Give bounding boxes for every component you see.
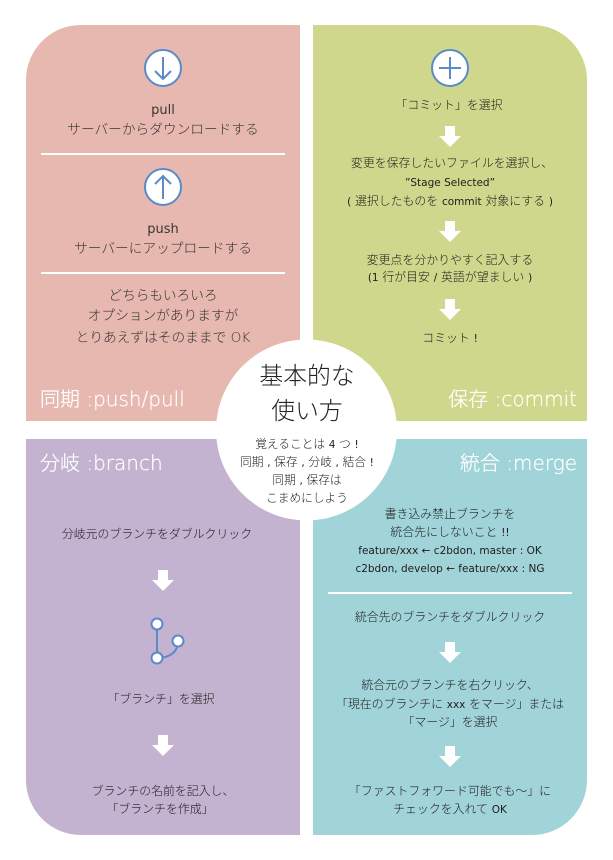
text: push: push: [147, 222, 179, 237]
center title: 使い方: [271, 397, 343, 425]
text: options note: どちらもいろいろ: [108, 288, 218, 304]
text: write message: (1 行が目安 / 英語が望ましい ): [368, 270, 532, 284]
text: options note: オプションがありますが: [88, 308, 239, 324]
center title: 基本的な: [259, 362, 355, 390]
text: options note: とりあえずはそのままで OK: [76, 330, 250, 346]
text: right click: 統合元のブランチを右クリック、: [361, 678, 539, 692]
text: write message: 変更点を分かりやすく記入する: [367, 253, 533, 267]
icon: pull down arrow: [145, 50, 181, 86]
heading: sync: 同期 :push/pull: [40, 387, 185, 411]
text: right click: 「マージ」を選択: [403, 715, 498, 729]
text: double click source: 分岐元のブランチをダブルクリック: [62, 527, 252, 541]
text: fast forward: チェックを入れて OK: [393, 802, 507, 816]
text: double click target: 統合先のブランチをダブルクリック: [355, 610, 545, 624]
text: protected branch warning: feature/xxx ← c2bdon, master : OK: [358, 545, 543, 557]
center circle: [216, 340, 397, 520]
center text: 同期 , 保存 , 分岐 , 結合 !: [240, 455, 374, 469]
text: push: サーバーにアップロードする: [74, 241, 252, 257]
heading: merge: 統合 :merge: [460, 451, 577, 475]
text: select branch: 「ブランチ」を選択: [107, 692, 215, 706]
icon: plus: [432, 50, 468, 86]
arrow: [439, 221, 461, 242]
arrow: [439, 746, 461, 767]
center text: 同期 , 保存は: [272, 473, 342, 487]
text: protected branch warning: 統合先にしないこと !!: [390, 525, 510, 539]
text: pull: サーバーからダウンロードする: [67, 122, 259, 138]
arrow: [439, 299, 461, 320]
text: choose files: ( 選択したものを commit 対象にする ): [347, 194, 553, 208]
panel: sync push/pull: [26, 25, 300, 421]
arrow: [152, 570, 174, 591]
arrow: [152, 735, 174, 756]
text: choose files: 変更を保存したいファイルを選択し、: [351, 156, 553, 170]
text: pull: pull: [151, 103, 175, 118]
arrow: [439, 126, 461, 147]
text: name branch: 「ブランチを作成」: [106, 802, 214, 816]
panel: merge: [313, 439, 587, 835]
center text: 覚えることは 4 つ !: [255, 437, 359, 451]
heading: save: 保存 :commit: [448, 387, 577, 411]
text: fast forward: 「ファストフォワード可能でも～」に: [349, 784, 551, 798]
icon: push up arrow: [145, 169, 181, 205]
center text: こまめにしよう: [266, 491, 348, 505]
text: protected branch warning: 書き込み禁止ブランチを: [385, 507, 515, 521]
panel: branch: [26, 439, 300, 835]
icon: branch: [152, 618, 184, 664]
heading: branch: 分岐 :branch: [40, 451, 163, 475]
text: select commit: 「コミット」を選択: [395, 98, 503, 112]
text: name branch: ブランチの名前を記入し、: [92, 784, 234, 798]
text: protected branch warning: c2bdon, develop ← feature/xxx : NG: [355, 563, 545, 575]
arrow: [439, 642, 461, 663]
text: right click: 「現在のブランチに xxx をマージ」または: [336, 697, 564, 711]
text: choose files: ”Stage Selected”: [405, 177, 495, 189]
text: commit: コミット !: [422, 331, 478, 345]
panel: save commit: [313, 25, 587, 421]
